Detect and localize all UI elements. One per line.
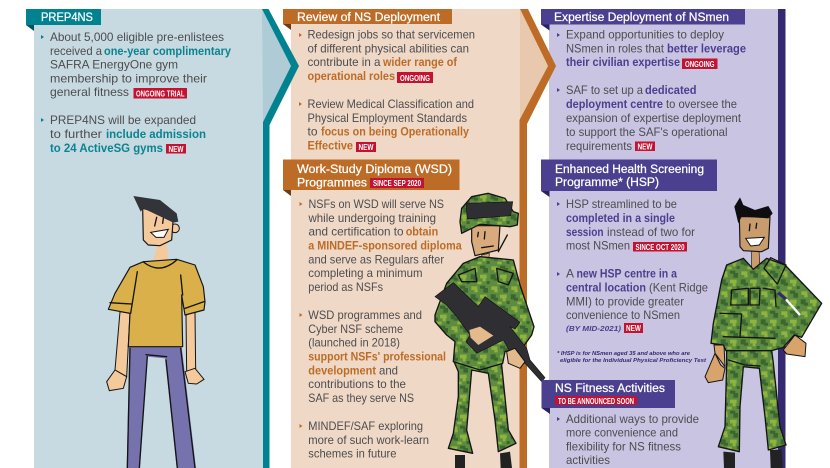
text block: Cyber NSF scheme <box>300 309 446 405</box>
text block: WSD diploma: period as NSFs <box>308 281 383 294</box>
text block: new HSP centre <box>557 268 708 333</box>
heading: Expertise Deployment of NSmen: Expertise Deployment of NSmen <box>554 10 729 24</box>
text block: new HSP centre: central location <box>566 282 646 294</box>
text block: civilian expertise <box>557 28 747 69</box>
text block: gym membership: membership to improve their <box>50 72 207 86</box>
text block: new HSP centre: MMI) to provide greater <box>566 296 684 308</box>
text block: single session: most NSmen <box>566 240 630 252</box>
text block: redesign jobs: of different physical abilities can <box>308 42 469 56</box>
text block: Cyber NSF scheme: (launched in 2018) <box>308 336 400 350</box>
text block: Cyber NSF scheme: SAF as they serve NS <box>308 392 414 405</box>
text block: ActiveSG gyms: PREP4NS will be expanded <box>50 114 196 127</box>
text block: redesign jobs <box>299 28 475 83</box>
text block: medical classification: NEW <box>358 142 374 152</box>
text block: WSD diploma: and serve as Regulars after <box>308 254 444 266</box>
text block: WSD diploma: a MINDEF-sponsored diploma <box>308 240 462 252</box>
heading: WSD programmes: Work-Study Diploma (WSD) <box>297 162 452 176</box>
text block: WSD diploma: obtain <box>406 226 438 238</box>
heading: Enhanced Health Screening Programme <box>541 160 717 197</box>
illustration: pre-enlistee boy <box>107 196 205 468</box>
text block: civilian expertise: Expand opportunities to deploy <box>566 28 724 42</box>
text block: new HSP centre: convenience to NSmen <box>566 309 680 322</box>
text block: WSD diploma <box>300 198 462 294</box>
text block: new HSP centre: NEW <box>626 323 642 333</box>
heading: WSD programmes: Programmes <box>297 176 367 190</box>
panel: Expertise Deployment and HSP <box>541 9 786 468</box>
text block: gym membership: one-year complimentary <box>104 45 232 58</box>
heading: NS Fitness Activities: NS Fitness Activities <box>555 381 665 395</box>
teal chevron border <box>262 9 299 468</box>
text block: dedicated deployment centre <box>557 84 742 153</box>
heading: WSD programmes <box>283 160 460 196</box>
text block: single session: HSP streamlined to be <box>566 198 677 211</box>
heading: PREP4NS: PREP4NS <box>41 10 93 24</box>
text block: fitness flexibility: activities <box>566 454 610 467</box>
text block: Cyber NSF scheme: development <box>308 364 376 378</box>
text block: new HSP centre: A <box>566 268 574 280</box>
text block: WSD diploma: and certification to <box>308 226 404 238</box>
text block: dedicated deployment centre: expansion of expertise deployment <box>566 112 742 125</box>
text block: work-learn schemes: MINDEF/SAF exploring <box>308 420 423 433</box>
text block: fitness flexibility: Additional ways to provide <box>566 413 699 426</box>
text block: civilian expertise: NSmen in roles that <box>566 42 665 56</box>
text block: ActiveSG gyms <box>41 114 206 155</box>
heading: PREP4NS <box>26 9 101 31</box>
text block: gym membership: received a <box>50 45 103 58</box>
text block: dedicated deployment centre: dedicated <box>645 84 696 97</box>
text block: civilian expertise: their civilian expertise <box>566 56 681 69</box>
text block: ActiveSG gyms: to further <box>50 128 102 141</box>
text block: new HSP centre: (Kent Ridge <box>649 282 708 294</box>
text block: new HSP centre: (BY MID-2021) <box>566 324 622 333</box>
text block: single session <box>557 198 695 252</box>
text block: gym membership: SAFRA EnergyOne gym <box>50 58 178 72</box>
text block: civilian expertise: better leverage <box>667 42 747 56</box>
navy side border <box>778 9 786 468</box>
text block: medical classification: Review Medical Classification and <box>308 98 474 111</box>
text block: medical classification <box>299 98 474 152</box>
heading: Review of NS Deployment <box>283 9 452 30</box>
text block: Cyber NSF scheme: WSD programmes and <box>308 309 422 322</box>
panel: NS Fitness Activities <box>542 380 699 467</box>
text block: Cyber NSF scheme: and <box>379 364 398 378</box>
footnote <box>557 351 706 364</box>
text block: fitness flexibility: more convenience and <box>566 426 678 440</box>
text block: gym membership: About 5,000 eligible pre-enlistees <box>50 31 224 44</box>
panel: PREP4NS <box>26 9 299 468</box>
text block: civilian expertise: ONGOING <box>685 59 715 69</box>
heading: WSD programmes: SINCE SEP 2020 <box>373 178 421 188</box>
text block: single session: instead of two for <box>607 226 695 239</box>
text block: redesign jobs: ONGOING <box>400 73 430 83</box>
illustration: smiling NSman soldier <box>705 197 822 468</box>
text block: medical classification: focus on being Operationally <box>321 126 470 138</box>
text block: dedicated deployment centre: requirements <box>566 140 632 153</box>
text block: redesign jobs: operational roles <box>308 70 395 83</box>
text block: ActiveSG gyms: include admission <box>106 128 206 141</box>
footnote: * IHSP is for NSmen aged 35 and above who are <box>557 351 690 357</box>
text block: dedicated deployment centre: to support the SAF's operational <box>566 126 728 139</box>
text block: gym membership: general fitness <box>50 86 129 99</box>
text block: single session: completed in a single <box>566 212 676 225</box>
heading: NS Fitness Activities <box>542 380 675 414</box>
heading: Review of NS Deployment: Review of NS Deployment <box>297 10 441 24</box>
text block: medical classification: Effective <box>308 140 354 152</box>
text block: redesign jobs: contribute in a <box>308 56 381 69</box>
text block: fitness flexibility <box>557 413 699 467</box>
illustration: soldier with rifle <box>435 193 545 468</box>
text block: Cyber NSF scheme: contributions to the <box>308 378 406 391</box>
heading: NS Fitness Activities: TO BE ANNOUNCED SOON <box>558 396 634 406</box>
text block: ActiveSG gyms: NEW <box>168 144 184 154</box>
footnote: eligible for the Individual Physical Proficiency Test <box>560 358 706 364</box>
text block: dedicated deployment centre: NEW <box>638 142 653 152</box>
text block: ActiveSG gyms: to 24 ActiveSG gyms <box>50 142 163 155</box>
text block: medical classification: Physical Employment Standards <box>308 112 467 125</box>
panel: Review of NS Deployment and WSD <box>283 9 556 468</box>
heading: Expertise Deployment of NSmen <box>541 9 745 30</box>
text block: WSD diploma: while undergoing training <box>308 212 436 225</box>
text block: gym membership: ONGOING TRIAL <box>136 88 184 98</box>
text block: dedicated deployment centre: SAF to set up a <box>566 84 644 97</box>
text block: fitness flexibility: flexibility for NS fitness <box>566 440 681 454</box>
text block: WSD diploma: NSFs on WSD will serve NS <box>308 198 444 211</box>
text block: dedicated deployment centre: deployment centre <box>566 98 664 111</box>
text block: new HSP centre: new HSP centre in a <box>576 268 677 280</box>
heading: Enhanced Health Screening Programme: Enhanced Health Screening <box>555 162 704 176</box>
text block: redesign jobs: Redesign jobs so that servicemen <box>308 28 475 42</box>
text block: medical classification: to <box>308 126 318 138</box>
text block: gym membership <box>41 31 232 99</box>
orange chevron border <box>520 9 556 468</box>
text block: single session: session <box>566 226 604 239</box>
text block: work-learn schemes <box>300 420 429 460</box>
text block: redesign jobs: wider range of <box>382 56 457 69</box>
text block: Cyber NSF scheme: Cyber NSF scheme <box>308 323 403 336</box>
text block: single session: SINCE OCT 2020 <box>636 242 685 252</box>
text block: Cyber NSF scheme: support NSFs' professional <box>308 350 446 364</box>
text block: dedicated deployment centre: to oversee the <box>666 98 737 111</box>
text block: work-learn schemes: schemes in future <box>308 448 396 460</box>
text block: WSD diploma: completing a minimum <box>308 267 422 280</box>
heading: Enhanced Health Screening Programme: Programme* (HSP) <box>555 175 659 189</box>
text block: work-learn schemes: more of such work-learn <box>308 434 429 447</box>
